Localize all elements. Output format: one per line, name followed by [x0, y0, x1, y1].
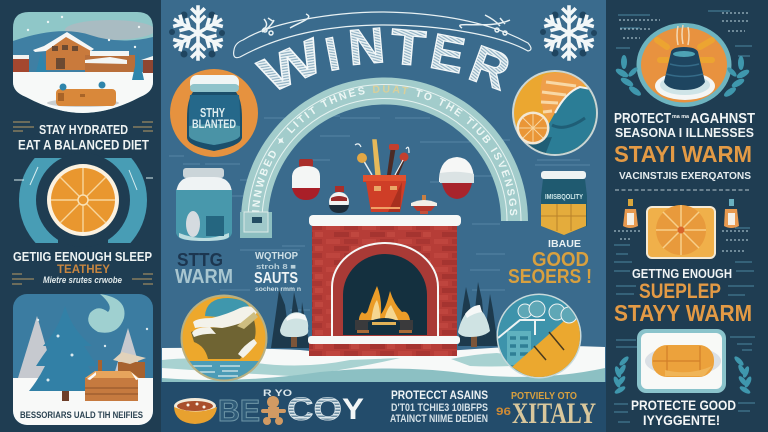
text: jar label: IMISBQOLITY	[545, 194, 583, 201]
title: winter: I	[321, 26, 344, 81]
text: protect against: ma ma	[672, 114, 689, 120]
panel: left column	[12, 12, 155, 425]
title: winter: T	[388, 19, 428, 77]
left panel background	[0, 0, 161, 432]
text: protecte good: PROTECTE GOOD	[631, 397, 736, 413]
text: protect against block	[390, 388, 488, 425]
icon: left laurel	[614, 55, 642, 97]
text: protect against block: PROTECCT ASAINS	[391, 388, 488, 402]
text: vaccinations: VACINSTJIS EXERQATONS	[619, 171, 751, 182]
icon: bread in white box	[637, 329, 726, 393]
text: small italic note: Mietre srutes crwobe	[43, 275, 122, 285]
arch band with curved text: IINNWBED ✦ LITIT THNES DUAT TO THE TIUB ISVENSGS	[252, 85, 518, 216]
illustration: snow ground	[162, 346, 605, 382]
title: winter: N	[346, 17, 387, 76]
text: stay warm left: WARM	[175, 266, 233, 288]
icon: orange slice in teal ring	[14, 158, 153, 243]
text: jar label: STHY	[200, 105, 225, 120]
title: winter: R	[462, 35, 517, 102]
text: stayy warm: STAYY WARM	[614, 300, 752, 326]
panel: center	[162, 5, 605, 382]
icon: carrot and building circle	[496, 294, 582, 378]
icon: small teal label tag	[240, 212, 272, 238]
panel: bottom band	[161, 382, 606, 432]
text: xitaly block	[496, 390, 596, 430]
icon: boot in yellow circle	[180, 294, 268, 385]
text: jar label	[192, 105, 236, 131]
icon: red pot with tools	[355, 140, 409, 212]
text: protect against block: ATAINCT NIIME DEDIEN	[390, 413, 488, 425]
text: good seoers: GOOD	[532, 249, 589, 271]
icon: left bottle	[623, 199, 638, 228]
text: hygiene: IYYGGENTE!	[643, 412, 720, 428]
text: getting enough: GETTNG ENOUGH	[632, 266, 732, 281]
icon: right snowflake	[540, 7, 597, 59]
text: stay warm left: STTG	[177, 250, 223, 270]
icon: red bottle left	[292, 159, 320, 200]
decorative banner flourish	[234, 12, 531, 58]
icon: teal and orange fruit circle	[510, 70, 600, 160]
panel: right column	[612, 11, 755, 428]
text: xitaly block: 96	[496, 406, 511, 418]
title: winter: E	[426, 23, 469, 84]
text: small note right	[722, 231, 750, 251]
text: teathey: TEATHEY	[57, 262, 110, 276]
icon: right bottle	[724, 199, 739, 228]
icon: bowl	[174, 398, 217, 424]
icon: jar in orange circle	[170, 69, 258, 157]
text: r yo: R YO	[263, 388, 292, 398]
text: xitaly block: XITALY	[512, 397, 596, 430]
icon: orange flower tile	[646, 205, 716, 259]
text: stay hydrated: STAY HYDRATED	[39, 122, 128, 137]
text: protect against: AGAHNST	[690, 110, 755, 127]
trees left of fireplace	[271, 290, 310, 348]
text: y: Y	[342, 393, 364, 426]
icon: right jar	[541, 171, 587, 235]
trees right of fireplace	[458, 282, 498, 347]
illustration: snowy tree scene	[13, 294, 153, 425]
right panel background	[606, 0, 768, 432]
icon: left snowflake	[169, 7, 225, 59]
illustration: snowy house scene	[13, 12, 155, 113]
icon: small dish	[411, 195, 437, 214]
text: sauts block: sochen rmm n	[255, 287, 301, 293]
title: winter: W	[251, 28, 332, 104]
text: jar label: BLANTED	[192, 117, 236, 131]
text: good seoers: IBAUE	[548, 238, 581, 250]
text: sueplep: SUEPLEP	[639, 280, 721, 303]
text: small note left	[614, 231, 642, 239]
text: scene caption: BESSORIARS UALD TIH NEIFIES	[20, 410, 143, 421]
icon: right laurel	[723, 56, 751, 98]
text: protect against	[614, 110, 755, 127]
text: sauts block: WQTHOP	[255, 250, 298, 262]
text: be: BE	[218, 393, 260, 428]
text: getting enough sleep: GETIIG EENOUGH SLEEP	[13, 249, 152, 264]
icon: lower right laurel	[733, 355, 753, 395]
text: sauts block: SAUTS	[254, 270, 298, 287]
text: protect against block: D'T01 TCHIE3 10IBFPS	[391, 402, 488, 414]
text: sauts block: stroh 8 ■	[256, 262, 297, 271]
icon: lower left laurel	[612, 355, 630, 395]
text: sauts block	[254, 250, 301, 293]
center background	[160, 0, 607, 382]
icon: bell on orange circle	[636, 23, 732, 107]
text: stay warm left	[175, 250, 233, 288]
text: xitaly block: POTVIELY OTO	[511, 390, 577, 402]
icon: red bottle right	[439, 157, 474, 199]
text: stay warm: STAYI WARM	[614, 141, 752, 167]
text: dotted small notes	[619, 13, 750, 38]
text: protect against: PROTECT	[614, 110, 671, 127]
text: good seoers: SEOERS !	[508, 266, 592, 288]
title: winter	[251, 17, 517, 104]
icon: left jar	[176, 168, 232, 241]
icon: small bottle	[329, 186, 349, 213]
illustration: fireplace	[308, 215, 461, 356]
text: eat a balanced diet: EAT A BALANCED DIET	[18, 138, 150, 152]
text: co: CO	[287, 391, 342, 427]
text: good seoers	[508, 238, 592, 288]
divider dashes	[615, 189, 751, 191]
text: seasonal illnesses: SEASONA I ILLNESSES	[615, 125, 754, 140]
icon: teddy bear	[261, 396, 286, 425]
